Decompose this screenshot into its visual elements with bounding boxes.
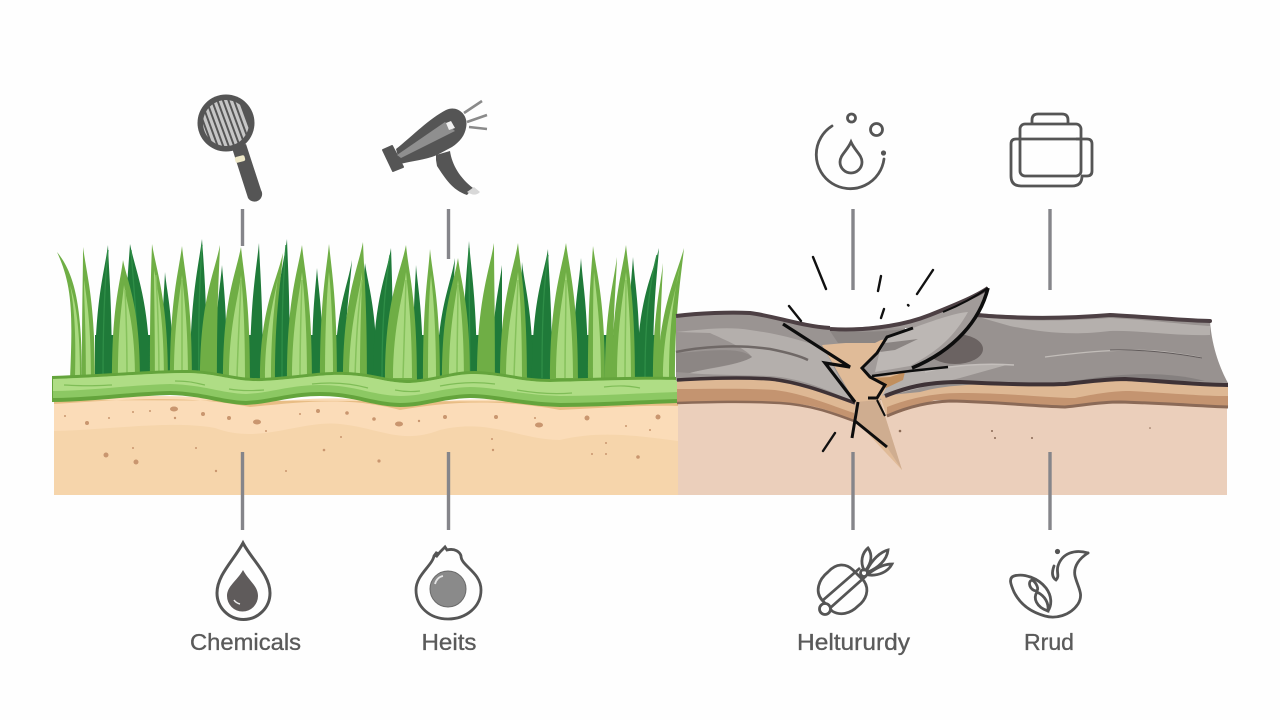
dark blades (95, 239, 659, 381)
soil specks (64, 406, 660, 472)
brown layers (677, 379, 855, 421)
light blade highlights (70, 265, 680, 378)
label: Rrud: Rrud (1024, 629, 1074, 655)
icon: bag (1011, 114, 1092, 186)
panel: damaged subsoil (678, 395, 1227, 495)
icon: ring with droplet (816, 114, 885, 189)
icon: vegetable (797, 548, 910, 655)
panel: healthy soil (54, 396, 678, 495)
crack lines (783, 288, 988, 447)
label: Chemicals: Chemicals (190, 629, 301, 655)
crack burst marks (789, 257, 933, 451)
panel: damaged turf left (676, 288, 988, 470)
blade centre veins (125, 275, 626, 378)
label: Heits: Heits (422, 629, 476, 655)
medium and light blades (57, 242, 684, 380)
exposed tan wedge (822, 338, 905, 470)
icon: leaf swirl (1011, 550, 1088, 655)
panel: damaged turf right (872, 311, 1228, 417)
dark hollow (927, 334, 983, 364)
healthy turf mat (52, 370, 678, 407)
lifted flap (830, 288, 988, 377)
connector lines (242, 209, 1050, 530)
icon: chemical drop (190, 543, 301, 655)
icon: hair dryer (383, 101, 487, 195)
healthy grass blades (57, 239, 684, 381)
label: Heltururdy: Heltururdy (797, 629, 910, 655)
darker blade midribs (103, 245, 657, 378)
icon: brush (198, 94, 262, 202)
icon: chipped sphere (416, 547, 481, 655)
